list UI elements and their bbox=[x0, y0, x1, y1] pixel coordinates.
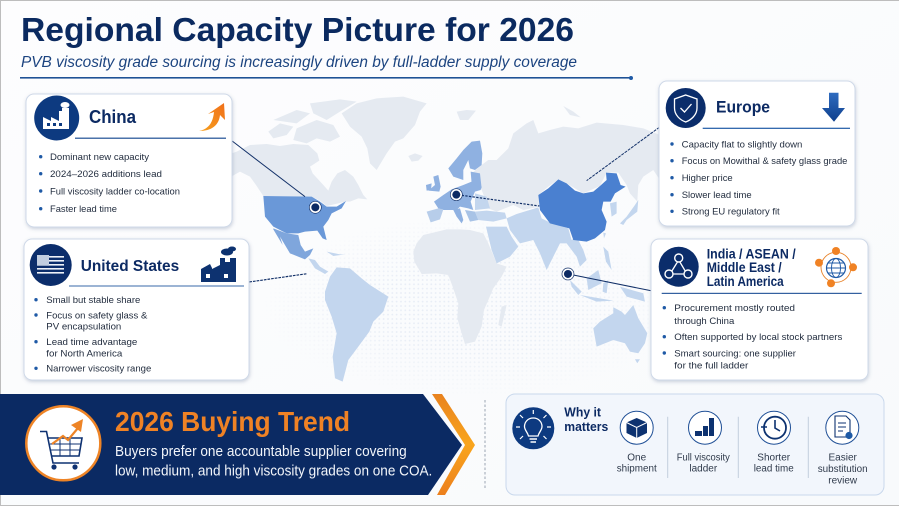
item: easier substitution review bbox=[818, 411, 868, 487]
list: Europe points: Strong EU regulatory fit bbox=[682, 207, 780, 218]
item: easier substitution review: Easier bbox=[829, 452, 858, 463]
banner: 2026 Buying Trend bbox=[0, 394, 475, 495]
map: Mexico bbox=[273, 228, 313, 259]
icon: factory bbox=[201, 246, 236, 282]
list: Europe points: Capacity flat to slightly down bbox=[682, 139, 802, 150]
item: shorter lead time bbox=[754, 411, 794, 475]
banner text bbox=[115, 443, 432, 480]
panel: Europe bbox=[659, 81, 855, 226]
connector: Europe marker to China bbox=[462, 195, 539, 206]
item: shorter lead time: lead time bbox=[754, 464, 794, 475]
item: full viscosity ladder: Full viscosity bbox=[677, 452, 730, 463]
panel: Why it matters bbox=[506, 394, 884, 495]
connector: India card bbox=[573, 275, 651, 291]
list: emerging region points: Often supported by local stock partners bbox=[674, 332, 843, 343]
heading: China: China bbox=[89, 107, 137, 127]
header rule bbox=[20, 76, 633, 80]
list: United States points: for North America bbox=[46, 348, 123, 359]
list: emerging region points: Procurement mostly routed bbox=[674, 303, 795, 314]
list: United States points: Focus on safety glass & bbox=[46, 310, 148, 321]
heading: regions: Middle East / bbox=[707, 260, 782, 275]
connector: Europe card bbox=[587, 127, 659, 181]
panel: United States bbox=[24, 239, 249, 380]
item: one shipment bbox=[617, 411, 657, 475]
icon: globe with orange nodes bbox=[815, 247, 857, 287]
heading: regions: India / ASEAN / bbox=[707, 246, 796, 261]
heading: 2026 Buying Trend bbox=[115, 406, 350, 437]
marker: Europe bbox=[450, 189, 462, 201]
map: grey landmasses bbox=[220, 97, 660, 344]
list: United States points bbox=[34, 295, 151, 375]
icon: factory bbox=[34, 96, 79, 140]
world map bbox=[232, 96, 658, 382]
icon: network bbox=[659, 247, 699, 287]
banner text: low, medium, and high viscosity grades on one COA. bbox=[115, 463, 432, 480]
item: full viscosity ladder bbox=[677, 411, 730, 475]
heading: Why it matters bbox=[564, 406, 608, 434]
marker: United States bbox=[309, 201, 321, 213]
subtitle: PVB viscosity grade sourcing is increasingly driven by full-ladder supply coverage bbox=[21, 54, 577, 71]
item: easier substitution review: review bbox=[828, 476, 858, 487]
heading: Europe: Europe bbox=[716, 98, 770, 117]
list: emerging region points: for the full ladder bbox=[674, 360, 748, 371]
list: United States points: Narrower viscosity range bbox=[46, 364, 151, 375]
icon: light bulb bbox=[512, 407, 554, 449]
map: light blue regions bbox=[308, 193, 647, 382]
heading: United States: United States bbox=[81, 258, 179, 275]
icon: shopping cart with trend arrow bbox=[26, 406, 100, 480]
list: China points: 2024–2026 additions lead bbox=[50, 169, 162, 180]
connector: China card bbox=[232, 141, 305, 197]
list: United States points: Lead time advantage bbox=[46, 337, 137, 348]
item: shorter lead time: Shorter bbox=[757, 452, 791, 463]
heading: regions: Latin America bbox=[707, 274, 784, 289]
heading: Why it matters: Why it bbox=[564, 406, 602, 420]
icon: shield bbox=[666, 88, 706, 128]
item: one shipment: One bbox=[627, 452, 647, 463]
list: emerging region points: Smart sourcing: one supplier bbox=[674, 348, 796, 359]
list: China points: Dominant new capacity bbox=[50, 152, 149, 163]
map: China bbox=[538, 173, 626, 242]
item: easier substitution review: substitution bbox=[818, 464, 868, 475]
map: United States bbox=[263, 196, 346, 240]
banner text: Buyers prefer one accountable supplier covering bbox=[115, 443, 407, 460]
list: emerging region points: through China bbox=[674, 316, 735, 327]
list: Europe points bbox=[670, 139, 847, 218]
list: United States points: PV encapsulation bbox=[46, 322, 121, 333]
icon: up arrow bbox=[199, 103, 225, 131]
heading: regions bbox=[707, 246, 796, 289]
panel: India / ASEAN / Middle East / Latin America bbox=[651, 239, 868, 380]
item: one shipment: shipment bbox=[617, 464, 657, 475]
list: China points: Full viscosity ladder co-location bbox=[50, 186, 180, 197]
list: Europe points: Slower lead time bbox=[682, 190, 752, 201]
connector: United States card bbox=[249, 274, 307, 282]
list: Europe points: Higher price bbox=[682, 173, 733, 184]
chevron bbox=[432, 394, 475, 495]
map: Europe bbox=[426, 141, 482, 223]
list: Europe points: Focus on Mowithal & safety glass grade bbox=[682, 156, 847, 167]
marker: Southeast Asia bbox=[562, 268, 574, 280]
title: Regional Capacity Picture for 2026 bbox=[21, 11, 574, 48]
icon: down arrow bbox=[822, 93, 845, 122]
list: China points bbox=[39, 152, 180, 215]
panel: China bbox=[26, 94, 232, 227]
item: full viscosity ladder: ladder bbox=[689, 464, 718, 475]
heading: Why it matters: matters bbox=[564, 420, 608, 434]
list: China points: Faster lead time bbox=[50, 204, 117, 215]
list: emerging region points bbox=[663, 303, 843, 371]
list: United States points: Small but stable share bbox=[46, 295, 140, 306]
icon: flag bbox=[30, 244, 72, 286]
